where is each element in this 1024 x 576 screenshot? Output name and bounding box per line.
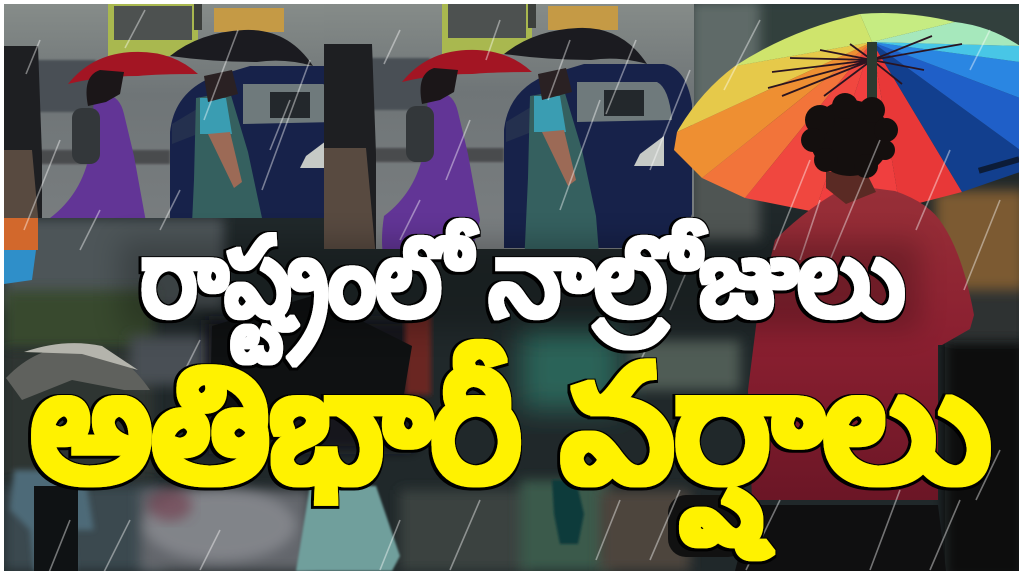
lower-left pedestrians [10, 470, 94, 571]
headline line 2: వర్షాలు [561, 333, 991, 559]
photo: women with umbrellas, left copy [4, 4, 324, 218]
headline line 2 [31, 333, 991, 559]
headline line 1: రాష్ట్రంలో [141, 215, 478, 367]
dark umbrella behind headline [210, 296, 412, 406]
photo: women with umbrellas, right copy [324, 4, 694, 249]
headline line 1: నాల్రోజులు [489, 215, 905, 350]
headline line 1 [141, 215, 905, 367]
lower-left grey umbrella [6, 343, 150, 400]
water splash [144, 489, 296, 561]
motorcycle, lower right [668, 495, 738, 557]
person in distance [552, 480, 584, 544]
lower-left orange bag and blue cloth [4, 218, 38, 284]
curly hair [801, 93, 898, 178]
pedestrian in teal [296, 486, 400, 571]
headline line 2: అతిభారీ [31, 333, 521, 516]
shadow behind headline [120, 240, 920, 330]
rainbow umbrella [674, 13, 1020, 213]
man in red shirt [735, 93, 974, 571]
